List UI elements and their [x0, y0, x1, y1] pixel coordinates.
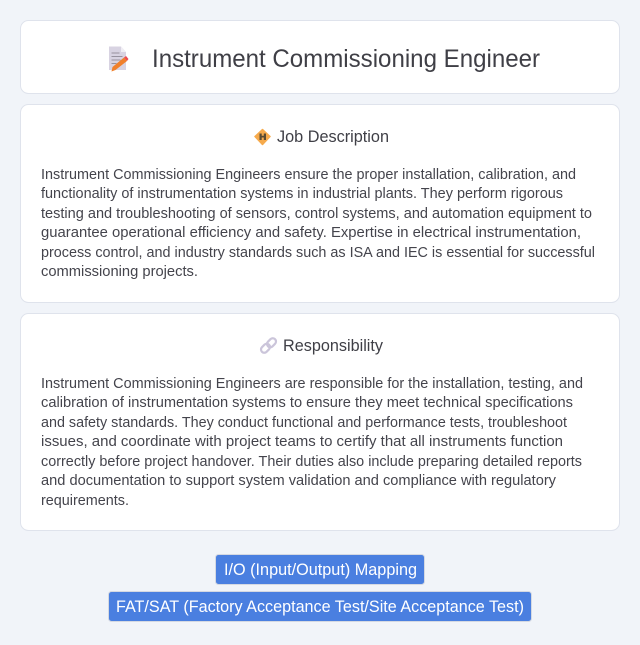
text block: responsibility: correctly before project handover. Their duties also include preparing detailed reports	[41, 454, 582, 470]
text block: job description: guarantee operational efficiency and safety. Expertise in electrical instrumentation,	[41, 225, 581, 241]
icon: diamond sign	[255, 130, 270, 144]
text block: responsibility: Instrument Commissioning Engineers are responsible for the installation, testing, and	[41, 376, 583, 392]
tag: I/O mapping: I/O (Input/Output) Mapping	[224, 561, 417, 579]
text block: job description: testing and troubleshooting of sensors, control systems, and automation equipment to	[41, 206, 592, 222]
text block: responsibility: requirements.	[41, 493, 129, 509]
text block: job description: process control, and industry standards such as ISA and IEC is essential for successful	[41, 245, 595, 261]
heading: responsibility: Responsibility	[283, 337, 384, 355]
tag: I/O mapping	[216, 554, 424, 584]
text block: responsibility: and safety standards. They conduct functional and performance tests, troubleshoot	[41, 415, 567, 431]
text block: responsibility	[41, 376, 583, 509]
heading: title: Instrument Commissioning Engineer	[152, 46, 540, 73]
tag: FAT/SAT: FAT/SAT (Factory Acceptance Test/Site Acceptance Test)	[116, 598, 524, 616]
tag: FAT/SAT	[108, 592, 532, 622]
panel: job description	[20, 104, 620, 302]
text block: job description	[41, 167, 595, 280]
text block: job description: commissioning projects.	[41, 264, 198, 280]
text block: responsibility: issues, and coordinate with project teams to certify that all instruments function	[41, 434, 563, 450]
panel: responsibility	[20, 314, 620, 530]
icon: chain link	[260, 337, 277, 354]
text block: responsibility: and documentation to support system validation and compliance with regulatory	[41, 473, 557, 489]
text block: job description: functionality of instrumentation systems in industrial plants. They perform rigorous	[41, 186, 563, 202]
heading: job description: Job Description	[277, 128, 389, 146]
icon: document with pencil	[109, 46, 128, 72]
text block: responsibility: calibration of instrumentation systems to ensure they meet technical specifications	[41, 395, 573, 411]
panel: title	[20, 20, 620, 94]
text block: job description: Instrument Commissioning Engineers ensure the proper installation, calibration, and	[41, 167, 576, 183]
